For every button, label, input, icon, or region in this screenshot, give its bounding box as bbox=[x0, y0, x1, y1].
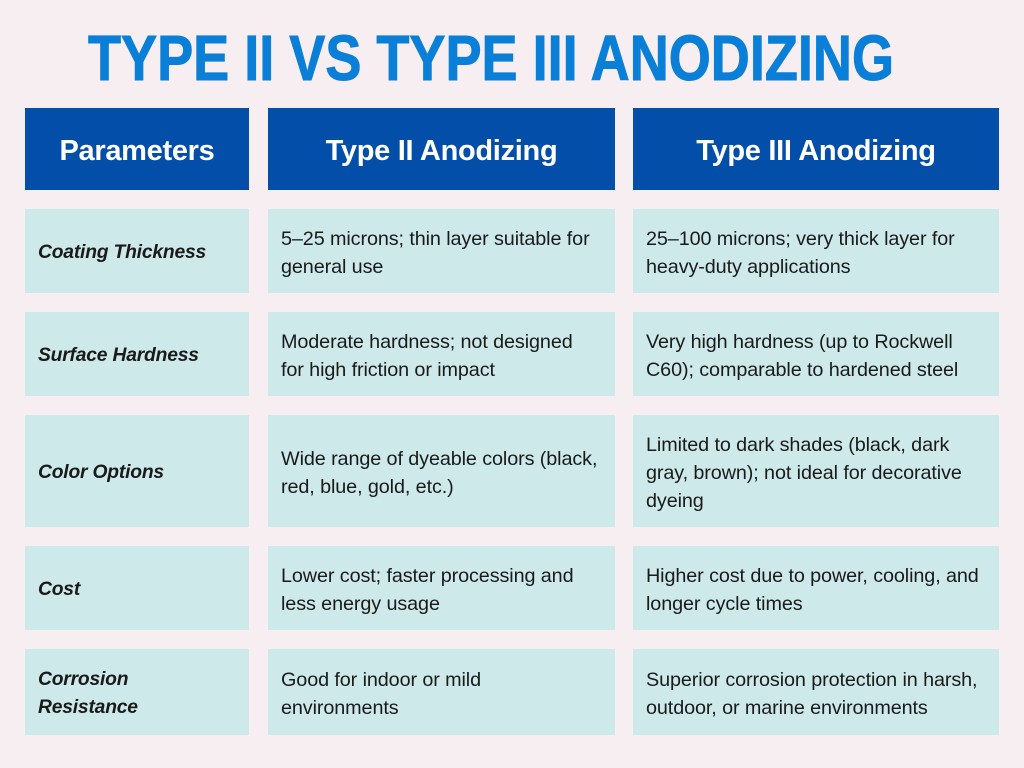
row: surface hardness label: Surface Hardness bbox=[38, 345, 199, 366]
row: color options type III bbox=[633, 415, 999, 527]
row: coating thickness type II: general use bbox=[281, 256, 383, 278]
row: color options type III: dyeing bbox=[646, 490, 704, 512]
row: surface hardness type III: Very high hardness (up to Rockwell bbox=[646, 331, 953, 353]
row: color options type II: Wide range of dyeable colors (black, bbox=[281, 448, 597, 470]
row: corrosion type II: environments bbox=[281, 697, 399, 719]
row: corrosion label: Resistance bbox=[38, 697, 138, 718]
header: parameters: Parameters bbox=[60, 134, 214, 166]
row: cost type II: less energy usage bbox=[281, 593, 440, 615]
row: coating thickness type II bbox=[268, 209, 615, 293]
row: corrosion type II bbox=[268, 649, 615, 735]
header: type II: Type II Anodizing bbox=[326, 134, 557, 166]
header: type III: Type III Anodizing bbox=[696, 134, 936, 166]
row: cost type III: Higher cost due to power, cooling, and bbox=[646, 565, 979, 587]
row: coating thickness type III bbox=[633, 209, 999, 293]
row: color options type II: red, blue, gold, etc.) bbox=[281, 476, 454, 498]
row: color options label bbox=[25, 415, 249, 527]
row: color options type III: gray, brown); not ideal for decorative bbox=[646, 462, 962, 484]
row: corrosion label bbox=[25, 649, 249, 735]
row: cost label: Cost bbox=[38, 579, 80, 600]
row: corrosion type II: Good for indoor or mild bbox=[281, 669, 481, 691]
row: cost type II bbox=[268, 546, 615, 630]
title: TYPE II VS TYPE III ANODIZING bbox=[88, 22, 894, 94]
row: color options label: Color Options bbox=[38, 462, 164, 483]
row: surface hardness type II: Moderate hardness; not designed bbox=[281, 331, 573, 353]
row: corrosion type III bbox=[633, 649, 999, 735]
header: parameters bbox=[25, 108, 249, 190]
row: color options type II bbox=[268, 415, 615, 527]
row: coating thickness type III: heavy-duty applications bbox=[646, 256, 850, 278]
row: corrosion label: Corrosion bbox=[38, 669, 128, 690]
row: surface hardness type III: C60); comparable to hardened steel bbox=[646, 359, 958, 381]
header: type III bbox=[633, 108, 999, 190]
row: color options type III: Limited to dark shades (black, dark bbox=[646, 434, 949, 456]
row: coating thickness type II: 5–25 microns; thin layer suitable for bbox=[281, 228, 590, 250]
row: corrosion type III: outdoor, or marine environments bbox=[646, 697, 928, 719]
row: surface hardness label bbox=[25, 312, 249, 396]
row: coating thickness type III: 25–100 microns; very thick layer for bbox=[646, 228, 955, 250]
row: surface hardness type II: for high friction or impact bbox=[281, 359, 495, 381]
row: coating thickness label: Coating Thickness bbox=[38, 242, 206, 263]
row: corrosion type III: Superior corrosion protection in harsh, bbox=[646, 669, 977, 691]
row: cost type II: Lower cost; faster processing and bbox=[281, 565, 573, 587]
row: cost type III bbox=[633, 546, 999, 630]
row: surface hardness type III bbox=[633, 312, 999, 396]
row: coating thickness label bbox=[25, 209, 249, 293]
header: type II bbox=[268, 108, 615, 190]
row: cost type III: longer cycle times bbox=[646, 593, 803, 615]
row: surface hardness type II bbox=[268, 312, 615, 396]
row: cost label bbox=[25, 546, 249, 630]
